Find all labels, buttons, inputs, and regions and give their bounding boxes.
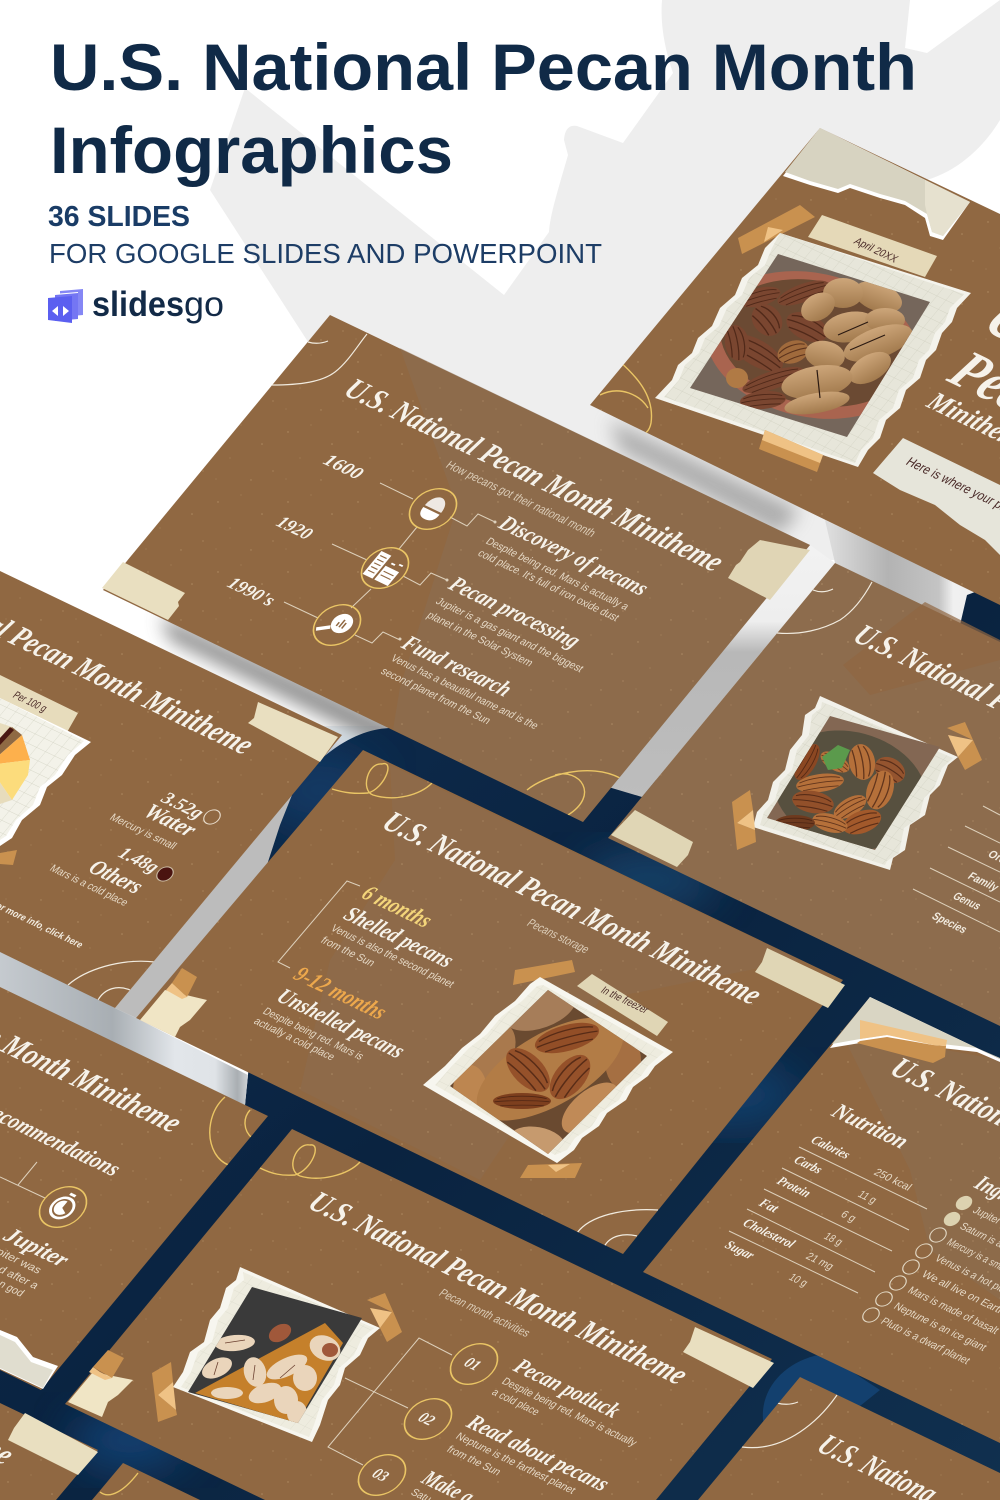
- item: pecan potluck: [489, 1353, 639, 1449]
- bottom tape: [759, 227, 823, 472]
- subtitle: [48, 201, 602, 269]
- nutrition table: 6 g: [838, 1209, 858, 1225]
- note: in the freezer: In the freezer: [598, 985, 651, 1016]
- nutrition table: 11 g: [855, 1189, 879, 1206]
- years: 1990's: [223, 573, 280, 610]
- icon: factory: [352, 541, 418, 595]
- years: 1600: [319, 450, 368, 483]
- date note: April 20XX: [851, 236, 900, 265]
- nutrition table: Calories: [808, 1133, 854, 1162]
- logo: slidesgo: go: [184, 285, 224, 324]
- ingredients list: Mars is made of basalt: [905, 1285, 1000, 1337]
- tapes: [68, 1293, 774, 1422]
- legend: others: [47, 843, 177, 909]
- curl: [210, 1097, 252, 1167]
- panel: slide 6 nutrition: [643, 997, 1000, 1443]
- torn paper: [0, 1330, 58, 1389]
- item: shelled pecans: [318, 880, 460, 990]
- item: pecan potluck: a cold place: [489, 1387, 542, 1418]
- torn paper top: [783, 128, 970, 240]
- icon: stopwatch: [30, 1180, 96, 1234]
- heading: nutrition: Nutrition: [826, 1098, 915, 1153]
- nutrition table: 21 mg: [803, 1251, 836, 1273]
- years: [223, 450, 368, 610]
- nutrition table: Protein: [774, 1174, 814, 1200]
- background silhouette: [210, 0, 1000, 560]
- step 03: [349, 1448, 415, 1500]
- photo: pecans on plate: [753, 696, 958, 870]
- nutrition table: [722, 1133, 927, 1293]
- slide subtitle: Pecans storage: [524, 917, 592, 956]
- logo: slidesgo: slides: [92, 285, 184, 324]
- curl: [332, 764, 658, 1247]
- panel: slide 5 pie chart: [0, 556, 342, 1008]
- slide subtitle: Pecan month activities: [436, 1287, 533, 1340]
- grey band between slides 2 and 3: [605, 545, 835, 797]
- torn paper top: [830, 997, 1000, 1062]
- tapes: [140, 948, 845, 1037]
- nutrition table: Fat: [755, 1195, 782, 1215]
- curves: [68, 961, 155, 1000]
- title: U.S. National Pecan Month: [50, 30, 917, 104]
- item: shelled pecans: 6 months: [357, 880, 439, 932]
- item: discovery of pecans: Despite being red. Mars is actually a: [483, 536, 631, 613]
- item: pecan processing: [424, 571, 587, 675]
- grey band between slides 5 and 8: [0, 945, 248, 1105]
- item: pecan potluck: Pecan potluck: [508, 1353, 627, 1423]
- item: discovery of pecans: Discovery of pecans: [493, 510, 655, 600]
- curves: [777, 582, 872, 633]
- tape: [857, 1020, 947, 1063]
- step 02: [395, 1392, 461, 1446]
- grey band between slides 5 and 4: [115, 795, 292, 1018]
- item: pecan potluck: Despite being red, Mars is actually: [499, 1376, 639, 1449]
- panel: slide 9: [698, 1377, 1000, 1500]
- subtitle: 36 SLIDES: [48, 201, 190, 233]
- legend: others: Mars is a cold place: [47, 863, 130, 909]
- nutrition table: Carbs: [791, 1153, 826, 1177]
- item: shelled pecans: Venus is also the second planet: [328, 923, 456, 990]
- ingredients list: We all live on Earth: [919, 1269, 1000, 1317]
- navy backdrop: [0, 585, 1000, 1500]
- legend: others: Others: [84, 854, 149, 898]
- note: per 100 g: Per 100 g: [10, 690, 49, 715]
- bottom tape: [520, 1163, 582, 1178]
- ingredients list: Pluto is a dwarf planet: [878, 1316, 972, 1367]
- panel: slide 11: [92, 1463, 200, 1500]
- item: jupiter: Jupiter: [0, 1222, 76, 1272]
- item: unshelled pecans: 9-12 months: [289, 961, 393, 1024]
- decorative curves: [272, 334, 620, 815]
- classification rows: [913, 806, 1000, 936]
- bracket: [278, 881, 360, 968]
- panel: slide 1 cover: [590, 128, 1000, 605]
- title: [50, 30, 917, 187]
- top tape: [513, 960, 575, 985]
- icon: magnifier chart: [304, 598, 370, 652]
- legend: water: Water: [139, 798, 203, 842]
- item: shelled pecans: Shelled pecans: [339, 901, 460, 972]
- connectors: [328, 1338, 452, 1465]
- photo: shelled nuts on board: [173, 1267, 380, 1442]
- date note: [808, 215, 937, 277]
- tape: [248, 702, 338, 762]
- item: pecan processing: Pecan processing: [443, 571, 587, 653]
- panel: slide 7 activities: [65, 1129, 774, 1500]
- legend: others: 1.48g: [114, 843, 164, 877]
- icon: stacked slides: [48, 289, 83, 323]
- item: unshelled pecans: Unshelled pecans: [272, 983, 411, 1063]
- timeline connectors: [284, 483, 496, 643]
- title: Infographics: [50, 113, 453, 187]
- nutrition table: 18 g: [821, 1231, 845, 1248]
- pie chart on paper: [0, 698, 91, 846]
- panel: slide 2 timeline: [102, 315, 810, 822]
- tape: [8, 1413, 98, 1475]
- connectors: [0, 1162, 45, 1198]
- panel: slide 10: [0, 1266, 98, 1500]
- item: unshelled pecans: actually a cold place: [251, 1016, 337, 1063]
- bottom tape: [0, 850, 17, 865]
- item: fund research: second planet from the Sun: [378, 666, 493, 727]
- slide title: U.S. National Pecan Month Minitheme: [301, 1186, 695, 1391]
- slide subtitle: How pecans got their national month: [443, 459, 598, 540]
- curl: [600, 360, 652, 436]
- years: 1920: [272, 512, 318, 544]
- nutrition table: 10 g: [786, 1272, 810, 1289]
- subtitle note: [873, 438, 1000, 555]
- slide title: U.S. National Pecan Month Minitheme: [337, 373, 731, 578]
- item: fund research: Fund research: [396, 630, 518, 701]
- icon: acorn: [400, 482, 466, 536]
- panel: slide 3 taxonomy: [608, 563, 1000, 1026]
- item: pecan processing: planet in the Solar System: [424, 610, 535, 669]
- item: discovery of pecans: cold place. It's full of iron oxide dust: [475, 548, 621, 624]
- note: per 100 g: [0, 675, 78, 736]
- nutrition table: Sugar: [722, 1238, 758, 1262]
- photo: bowl of pecans: [655, 233, 971, 467]
- step 01: 01: [460, 1354, 485, 1374]
- note: in the freezer: [577, 974, 668, 1036]
- item: fund research: Venus has a beautiful name and is the: [388, 653, 541, 732]
- item: unshelled pecans: Despite being red. Mars is: [260, 1006, 366, 1063]
- item: read about pecans: from the Sun: [444, 1444, 503, 1478]
- tapes: [102, 540, 810, 620]
- item: jupiter: [0, 1222, 76, 1299]
- legend: water: [107, 787, 224, 852]
- item: shelled pecans: from the Sun: [318, 935, 377, 969]
- classification rows: Species: [929, 910, 970, 936]
- subtitle: FOR GOOGLE SLIDES AND POWERPOINT: [49, 238, 602, 269]
- item: read about pecans: Read about pecans: [461, 1409, 616, 1496]
- classification rows: Genus: [950, 890, 983, 913]
- step 03: 03: [368, 1465, 393, 1486]
- ingredients list: [859, 1170, 1000, 1367]
- tapes: [611, 722, 982, 867]
- soft shadows: [160, 420, 800, 765]
- item: unshelled pecans: [251, 961, 411, 1063]
- panel: slide 8 recommendations: [0, 987, 268, 1390]
- nutrition table: 250 kcal: [871, 1167, 914, 1193]
- grey band between slides 1 and 3: [825, 520, 975, 625]
- cover title: [920, 283, 1000, 458]
- item: read about pecans: Neptune is the farthest planet: [453, 1431, 578, 1497]
- curves: [742, 1395, 837, 1448]
- ingredients list: Neptune is an ice giant: [891, 1301, 989, 1354]
- curl: [100, 1473, 138, 1495]
- logo: slidesgo: [48, 285, 224, 324]
- legend: water: 3.52g: [156, 787, 209, 823]
- legend: water: Mercury is small: [107, 812, 178, 852]
- photo: pecans on wooden leaf: [423, 976, 673, 1163]
- nutrition table: Cholesterol: [740, 1216, 799, 1251]
- step 01: [441, 1337, 507, 1391]
- slide title: U.S. National Pecan Month Minitheme: [375, 806, 769, 1011]
- item: pecan processing: Jupiter is a gas giant and the biggest: [433, 596, 585, 675]
- curl: [260, 1145, 360, 1178]
- tape: [738, 205, 815, 254]
- step 02: 02: [414, 1409, 439, 1430]
- panel: slide 4 storage: [136, 750, 845, 1254]
